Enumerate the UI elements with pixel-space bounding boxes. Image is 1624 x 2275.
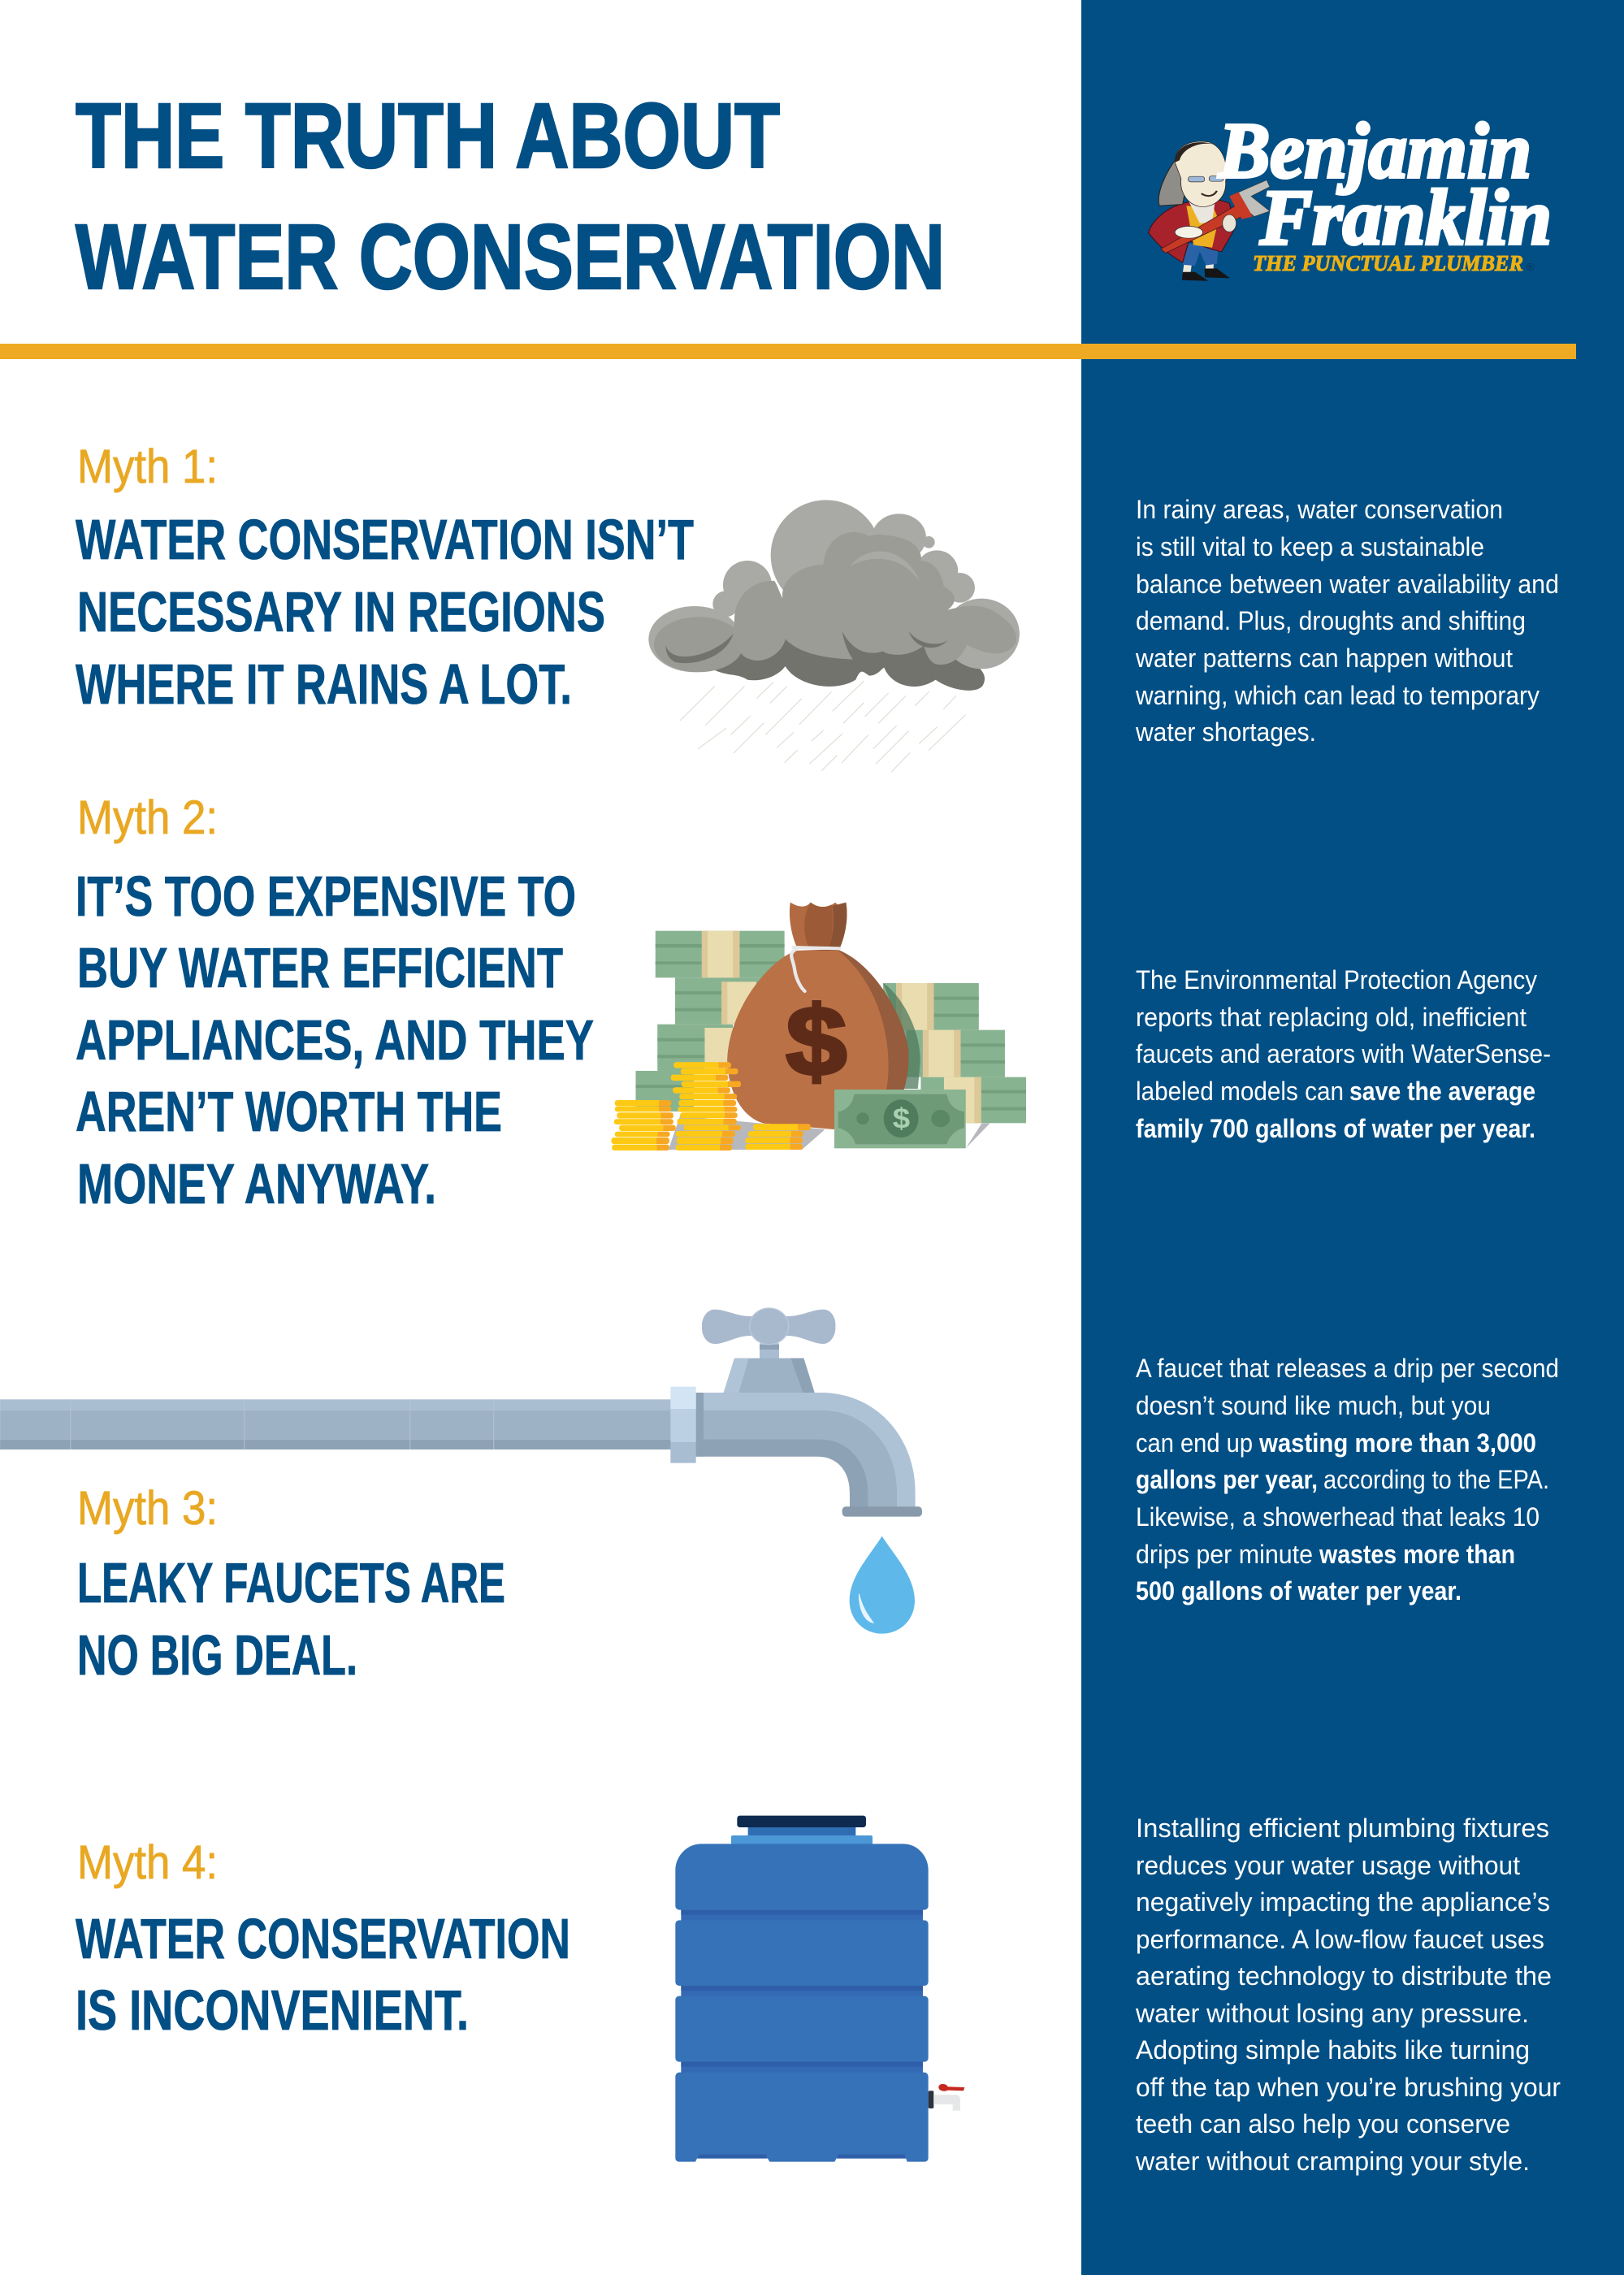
icon: leaky faucet with pipe and drop	[0, 1308, 922, 1634]
text block: myth 2 fact: labeled models can	[1136, 1077, 1344, 1106]
text block: myth 3 fact: Likewise, a showerhead that leaks 10	[1136, 1502, 1540, 1532]
text block: myth 4 fact: Installing efficient plumbing fixtures	[1136, 1814, 1549, 1843]
panel: myth 2	[76, 791, 594, 1216]
myth 3 statement: NO BIG DEAL.	[77, 1623, 357, 1687]
bag	[727, 949, 909, 1129]
dollar sign: $	[786, 986, 847, 1096]
text block: myth 2 fact: The Environmental Protection Agency	[1136, 965, 1537, 994]
logo: Benjamin Franklin The Punctual Plumber: ®	[1527, 261, 1535, 273]
yellow header rule	[0, 344, 1576, 359]
text block: myth 4 fact: performance. A low-flow faucet uses	[1136, 1925, 1544, 1954]
myth 4 statement: IS INCONVENIENT.	[76, 1978, 469, 2042]
text block: myth 3 fact: wastes more than	[1319, 1540, 1515, 1569]
myth 2 statement: APPLIANCES, AND THEY	[76, 1008, 594, 1072]
myth 1 statement: NECESSARY IN REGIONS	[77, 580, 605, 644]
myth 3 statement	[77, 1551, 505, 1687]
text block: myth 4 fact	[1135, 1814, 1561, 2176]
text block: myth 1 fact: warning, which can lead to temporary	[1135, 681, 1540, 710]
myth 2 statement: IT’S TOO EXPENSIVE TO	[76, 864, 576, 928]
tank spigot	[929, 2084, 964, 2111]
title	[76, 84, 945, 308]
logo wordmark: Benjamin	[1218, 107, 1531, 195]
myth 1 statement	[76, 508, 694, 716]
text block: myth 1 fact: water shortages.	[1135, 717, 1316, 747]
myth 4 label: Myth 4:	[77, 1836, 218, 1889]
icon: money bag with cash and coins	[611, 903, 1026, 1150]
myth 1 statement: WHERE IT RAINS A LOT.	[76, 652, 572, 716]
text block: myth 4 fact: aerating technology to distribute the	[1136, 1961, 1552, 1991]
text block: myth 2 fact: faucets and aerators with WaterSense-	[1136, 1039, 1551, 1068]
text block: myth 4 fact: teeth can also help you conserve	[1136, 2109, 1510, 2138]
text block: myth 3 fact: 500 gallons of water per year.	[1136, 1576, 1462, 1606]
text block: myth 1 fact: is still vital to keep a sustainable	[1136, 532, 1484, 561]
water drop	[850, 1536, 915, 1634]
myth 3 statement: LEAKY FAUCETS ARE	[77, 1551, 505, 1614]
myth 4 statement	[76, 1907, 570, 2042]
text block: myth 2 fact: save the average	[1349, 1077, 1535, 1106]
myth 2 statement: AREN’T WORTH THE	[76, 1080, 502, 1143]
myth 2 statement: BUY WATER EFFICIENT	[77, 936, 563, 999]
panel: myth 1	[76, 440, 694, 716]
text block: myth 1 fact: balance between water availability and	[1136, 570, 1559, 599]
myth 1 label: Myth 1:	[77, 440, 218, 493]
text block: myth 3 fact: doesn’t sound like much, but you	[1136, 1391, 1491, 1420]
text block: myth 4 fact: negatively impacting the appliance’s	[1136, 1887, 1550, 1917]
text block: myth 4 fact: water without losing any pressure.	[1135, 1999, 1529, 2028]
title: THE TRUTH ABOUT	[76, 84, 780, 187]
title: WATER CONSERVATION	[76, 206, 945, 308]
text block: myth 1 fact: water patterns can happen without	[1135, 644, 1513, 673]
dollar bill: $	[893, 1102, 910, 1134]
icon: water storage tank	[675, 1816, 964, 2162]
text block: myth 1 fact: demand. Plus, droughts and shifting	[1136, 606, 1526, 635]
text block: myth 1 fact	[1135, 495, 1559, 747]
myth 2 statement	[76, 864, 594, 1216]
logo: Benjamin Franklin The Punctual Plumber: Franklin	[1259, 174, 1552, 262]
pipe	[0, 1399, 672, 1450]
panel: myth 4	[76, 1836, 570, 2042]
handle	[702, 1308, 835, 1393]
logo: Benjamin Franklin The Punctual Plumber: THE PUNCTUAL PLUMBER	[1253, 251, 1523, 275]
text block: myth 2 fact: reports that replacing old, inefficient	[1136, 1003, 1527, 1032]
myth 3 label: Myth 3:	[77, 1482, 218, 1535]
icon: Ben Franklin mascot	[1149, 141, 1270, 281]
logo: Benjamin Franklin The Punctual Plumber	[1149, 107, 1552, 281]
panel: right facts column	[1081, 0, 1624, 2275]
text block: myth 3 fact: wasting more than 3,000	[1258, 1428, 1536, 1458]
myth 2 label: Myth 2:	[77, 791, 218, 844]
myth 2 statement: MONEY ANYWAY.	[77, 1152, 436, 1216]
text block: myth 1 fact: In rainy areas, water conservation	[1136, 495, 1503, 524]
text block: myth 4 fact: Adopting simple habits like turning	[1136, 2035, 1530, 2065]
pipe collar	[670, 1387, 696, 1463]
text block: myth 4 fact: reduces your water usage without	[1136, 1851, 1520, 1880]
panel: myth 3	[77, 1482, 505, 1687]
myth 1 statement: WATER CONSERVATION ISN’T	[76, 508, 694, 571]
text block: myth 3 fact: drips per minute	[1136, 1540, 1313, 1569]
icon: rain cloud	[648, 500, 1020, 772]
text block: myth 3 fact: A faucet that releases a drip per second	[1136, 1354, 1559, 1383]
text block: myth 3 fact: according to the EPA.	[1323, 1465, 1549, 1494]
text block: myth 2 fact	[1136, 965, 1551, 1143]
text block: myth 2 fact: family 700 gallons of water per year.	[1136, 1114, 1535, 1143]
text block: myth 3 fact: gallons per year,	[1136, 1465, 1318, 1494]
spout	[696, 1393, 922, 1517]
myth 4 statement: WATER CONSERVATION	[76, 1907, 570, 1970]
text block: myth 4 fact: water without cramping your style.	[1135, 2147, 1530, 2176]
dollar bill	[834, 1090, 966, 1148]
text block: myth 4 fact: off the tap when you’re brushing your	[1136, 2073, 1561, 2102]
coins	[611, 1062, 811, 1150]
cash stacks	[635, 931, 1026, 1150]
text block: myth 3 fact	[1136, 1354, 1559, 1606]
text block: myth 3 fact: can end up	[1136, 1428, 1253, 1458]
